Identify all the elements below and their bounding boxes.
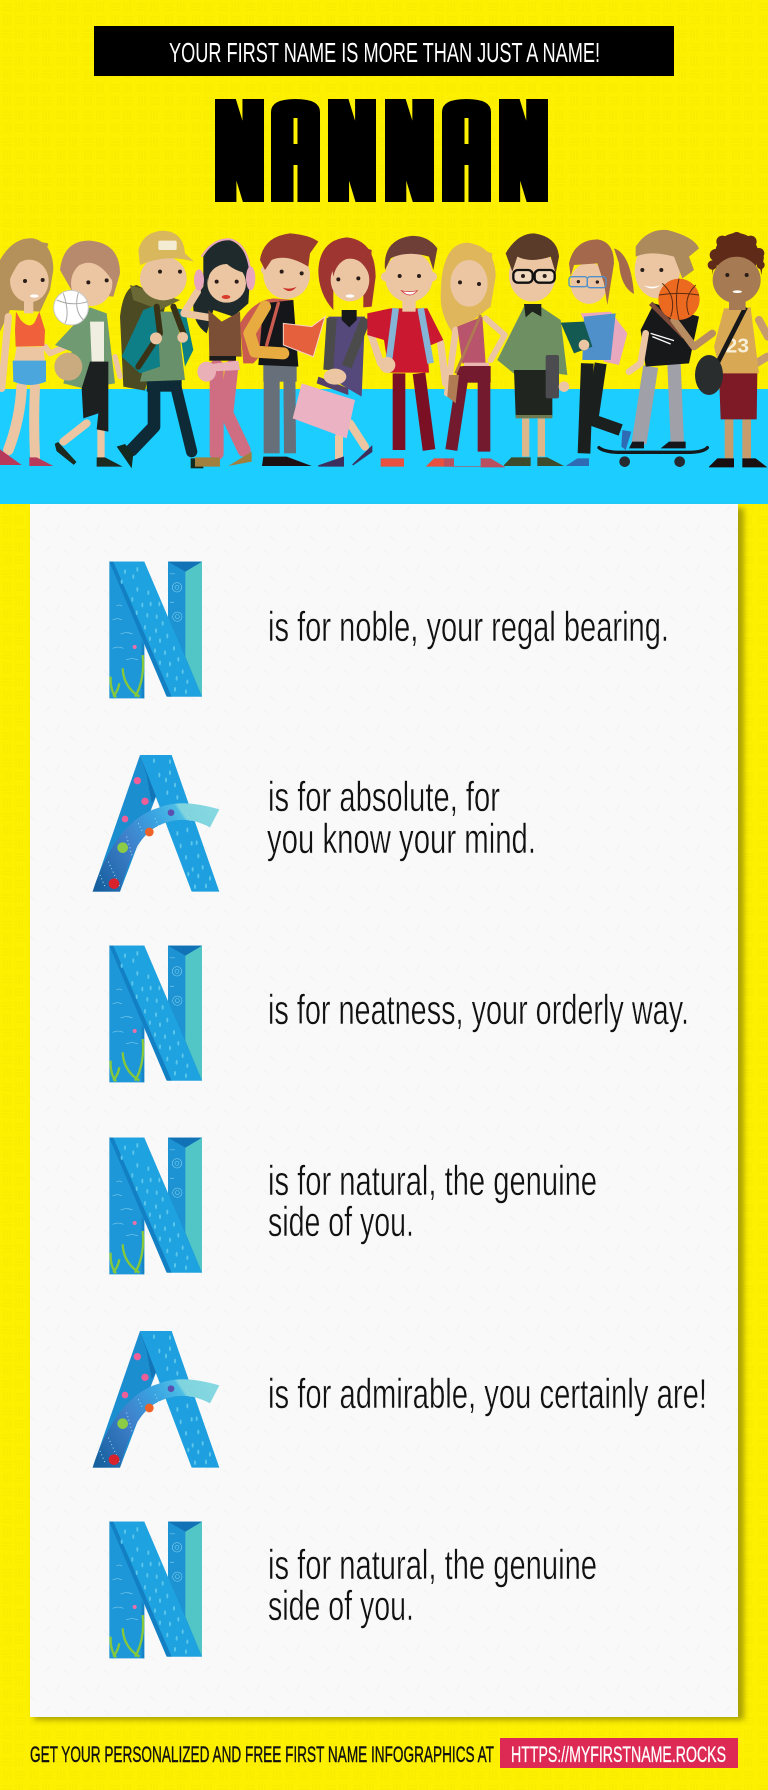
person 6: girl with pink bag xyxy=(293,237,376,466)
row 3: letter N icon xyxy=(109,946,202,1082)
cyan floor band xyxy=(0,389,768,504)
row 6 text: is for natural, the genuine xyxy=(268,1541,597,1588)
person 12: boy in number 23 tank top: 23 xyxy=(726,335,749,358)
row 2: letter A icon xyxy=(93,755,219,892)
row 6 text xyxy=(268,1541,597,1629)
person 2: girl with volleyball xyxy=(54,241,123,467)
person 12: boy in number 23 tank top xyxy=(695,232,768,467)
footer call to action: GET YOUR PERSONALIZED AND FREE FIRST NAME INFOGRAPHICS AT xyxy=(30,1742,494,1767)
row 6: letter N icon xyxy=(109,1522,202,1658)
person 8: blonde girl xyxy=(441,243,506,467)
row 4: letter N icon xyxy=(109,1138,202,1274)
person 10: girl with ponytail and tablet xyxy=(561,239,634,466)
person 1: girl in orange top xyxy=(0,238,78,466)
row 2 text xyxy=(267,773,536,862)
row 6 text: side of you. xyxy=(268,1582,414,1629)
row 2 text: you know your mind. xyxy=(267,815,536,862)
card shadow xyxy=(34,508,744,1720)
row 4 text: side of you. xyxy=(268,1198,414,1245)
illustration: group of young people xyxy=(0,230,768,468)
person 9: boy with glasses and laptop xyxy=(497,233,569,466)
person 11: skateboarder with basketball xyxy=(599,230,712,467)
person 7: boy in red shirt xyxy=(367,236,454,467)
row 1: letter N icon xyxy=(109,562,202,698)
row 5: letter A icon xyxy=(93,1331,219,1468)
tagline banner xyxy=(94,26,674,76)
row 2 text: is for absolute, for xyxy=(268,773,500,820)
row 4 text xyxy=(268,1157,597,1245)
person 3: hiker with backpack and cap xyxy=(117,231,203,468)
panel: letters card xyxy=(30,504,738,1717)
person 5: boy reading a book xyxy=(240,233,325,466)
person 4: girl with pink headphones xyxy=(184,239,255,467)
title: name: NANNAN xyxy=(218,89,545,214)
row 4 text: is for natural, the genuine xyxy=(268,1157,597,1204)
